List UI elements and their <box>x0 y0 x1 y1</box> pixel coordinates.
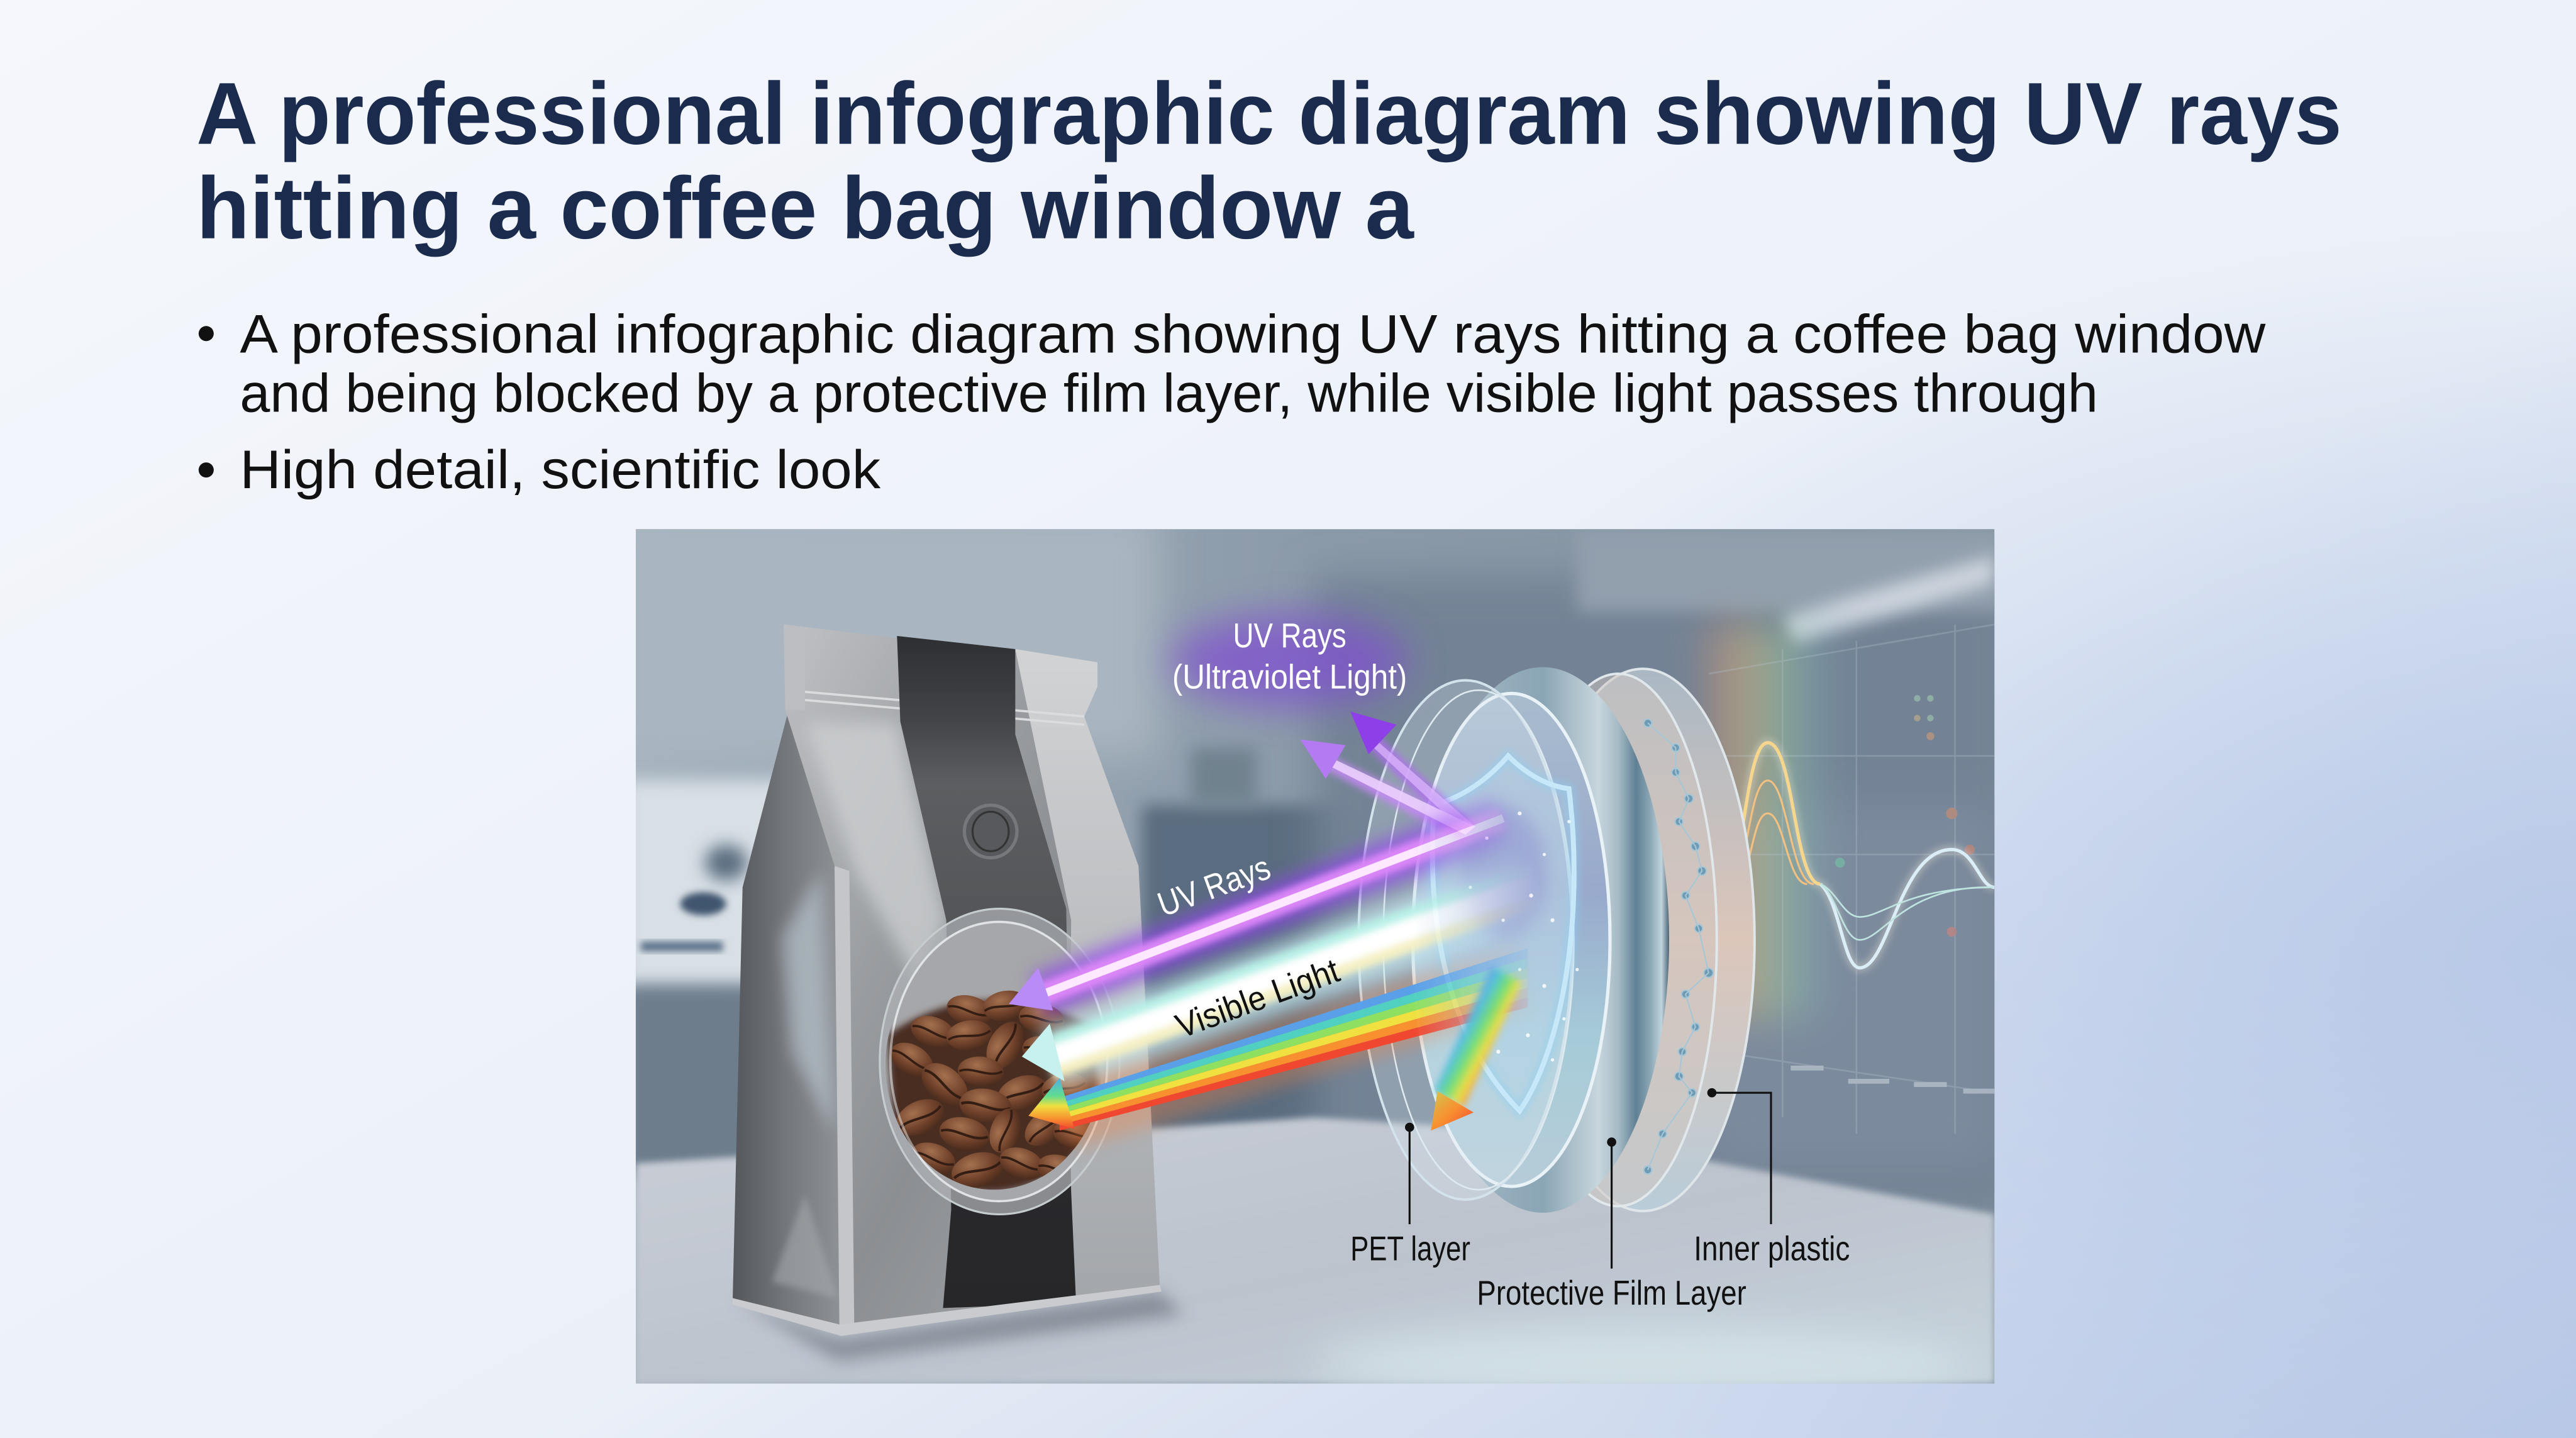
front glass <box>1413 693 1610 1186</box>
UV reflected arrows <box>1301 711 1475 841</box>
zip seal <box>805 692 1084 725</box>
glow behind UV label <box>1172 615 1408 706</box>
coffee bag <box>733 625 1183 1361</box>
bullet list: A professional infographic diagram showing UV rays hitting a coffee bag window <box>240 304 2266 364</box>
lab background <box>616 510 2021 1384</box>
reflected rainbow arrow <box>1431 966 1521 1130</box>
callout: PET layer: PET layer <box>1350 1229 1470 1268</box>
shield <box>1433 756 1574 1111</box>
title: A professional infographic diagram showing UV rays <box>196 64 2342 163</box>
UV ray beam <box>1038 818 1503 996</box>
arrowheads <box>1009 968 1074 1129</box>
illustration panel <box>616 510 2021 1400</box>
side gusset <box>733 710 841 1334</box>
coffee beans <box>884 987 1101 1193</box>
callout: Inner plastic: Inner plastic <box>1694 1229 1850 1268</box>
label: UV Rays beam: UV Rays <box>1152 847 1275 924</box>
bag base <box>733 1285 1162 1336</box>
label: UV Rays (Ultraviolet Light): UV Rays <box>1233 616 1346 655</box>
inner plastic <box>1531 669 1755 1211</box>
label: UV Rays (Ultraviolet Light) <box>1172 616 1407 696</box>
callout: PET layer <box>1350 1123 1470 1268</box>
lens layers <box>1358 667 1755 1213</box>
title <box>196 64 2342 257</box>
bag shadow <box>733 1291 1183 1361</box>
chart display <box>1709 625 1994 1134</box>
callout: Protective Film Layer: Protective Film Layer <box>1477 1273 1746 1312</box>
front panel <box>784 625 1160 1336</box>
window <box>880 909 1119 1214</box>
valve <box>964 805 1017 858</box>
protective film metal band <box>1416 667 1669 1213</box>
molecules <box>1644 719 1713 1174</box>
callout: Inner plastic <box>1694 1088 1850 1268</box>
label: Visible Light: Visible Light <box>1170 950 1345 1045</box>
wave graph <box>1722 743 1994 968</box>
title: hitting a coffee bag window a <box>196 159 1414 257</box>
rainbow beam <box>1060 948 1528 1130</box>
callout: Protective Film Layer <box>1477 1137 1746 1312</box>
black stripe <box>897 636 1076 1308</box>
sparkle dots <box>1468 811 1579 1062</box>
label: UV Rays (Ultraviolet Light): (Ultraviolet Light) <box>1172 657 1407 696</box>
PET layer <box>1358 680 1572 1200</box>
table surface <box>636 1117 1994 1400</box>
visible light beam <box>1052 872 1536 1068</box>
bullet list: and being blocked by a protective film layer, while visible light passes through <box>240 363 2098 423</box>
bullet list <box>199 304 2266 500</box>
bullet list: High detail, scientific look <box>240 440 881 500</box>
